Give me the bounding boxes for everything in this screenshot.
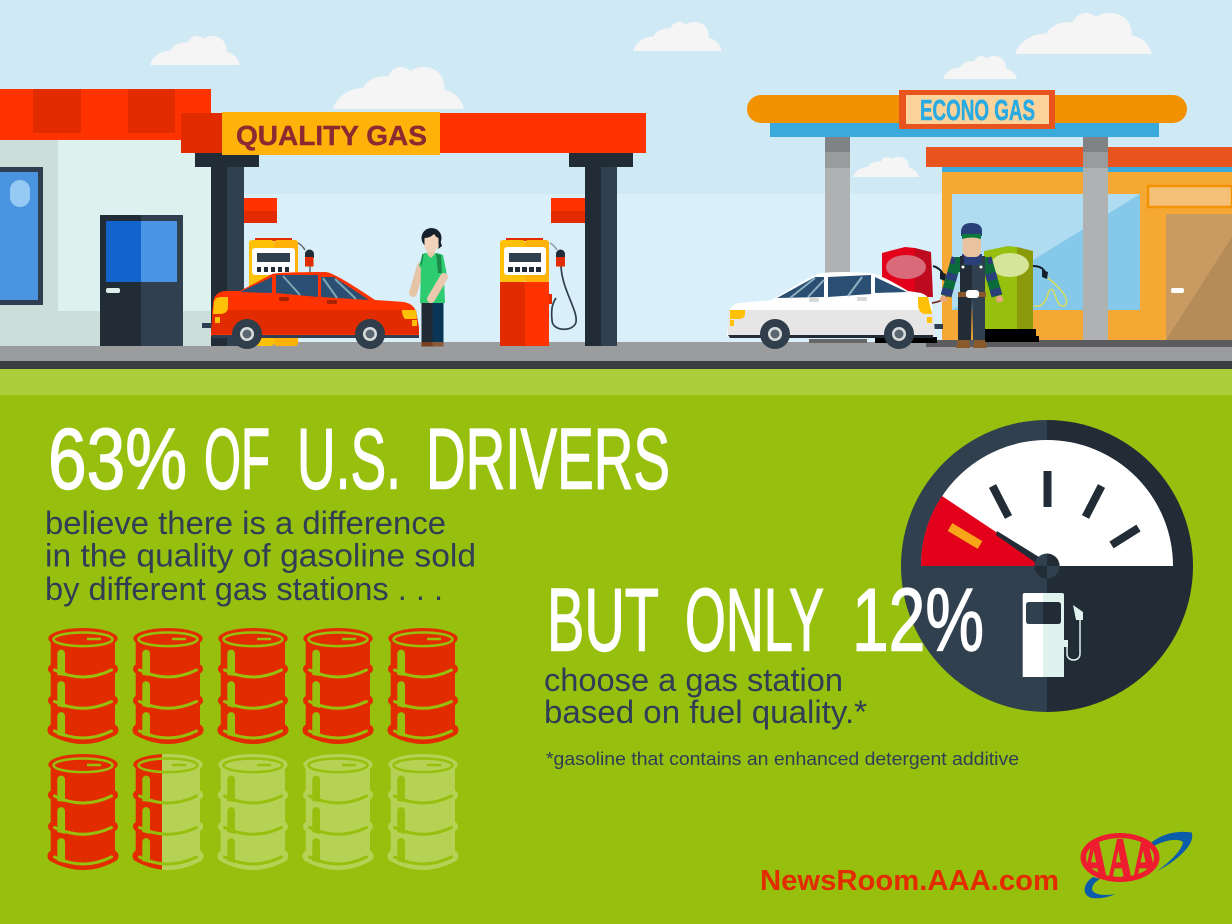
clouds (150, 13, 1152, 177)
text: belief statement: by different gas stations . . . (45, 571, 443, 607)
text: fuel quality statement (544, 662, 867, 730)
right fuel pump (500, 238, 576, 346)
econo gas sign (899, 90, 1055, 129)
headline: 63% of U.S. drivers (48, 412, 670, 508)
headline: 63% of U.S. drivers: OF (204, 412, 270, 508)
headline: 63% of U.S. drivers: DRIVERS (426, 412, 670, 508)
headline: but only 12%: 12% (852, 570, 984, 670)
footnote: *gasoline that contains an enhanced detergent additive (546, 749, 1019, 769)
text: fuel quality statement: based on fuel quality.* (544, 694, 867, 730)
AAA logo: AAA (1083, 827, 1157, 893)
barrel pictogram: 63 percent filled (48, 628, 458, 864)
red car (202, 272, 419, 349)
gas attendant figure (940, 223, 1003, 348)
quality gas store building (0, 89, 211, 346)
econo gas sign: ECONO GAS (920, 95, 1035, 127)
headline: 63% of U.S. drivers: 63% (48, 412, 187, 508)
sky background (0, 0, 1232, 354)
quality gas canopy and posts (181, 113, 646, 346)
website link: NewsRoom.AAA.com (760, 865, 1059, 897)
text: fuel quality statement: choose a gas station (544, 662, 843, 698)
ground: pavement, road edge and grass (0, 342, 1232, 924)
left fuel pump behind red car (249, 238, 314, 346)
fuel gauge (901, 420, 1193, 712)
headline: but only 12%: ONLY (685, 570, 824, 670)
econo gas canopy and posts (747, 95, 1187, 340)
text: belief statement: believe there is a difference (45, 505, 446, 541)
icon: fuel pump in gauge (1023, 593, 1083, 677)
green econo pump (984, 246, 1067, 342)
headline: but only 12% (547, 570, 984, 670)
quality gas sign: QUALITY GAS (236, 120, 427, 151)
text: belief statement (45, 505, 476, 607)
text: belief statement: in the quality of gasoline sold (45, 538, 476, 574)
red econo pump (882, 247, 947, 303)
econo gas store building (926, 147, 1232, 347)
customer figure (413, 228, 447, 346)
headline: but only 12%: BUT (547, 570, 659, 670)
white car (727, 272, 943, 349)
quality gas sign (222, 112, 440, 155)
headline: 63% of U.S. drivers: U.S. (297, 412, 401, 508)
